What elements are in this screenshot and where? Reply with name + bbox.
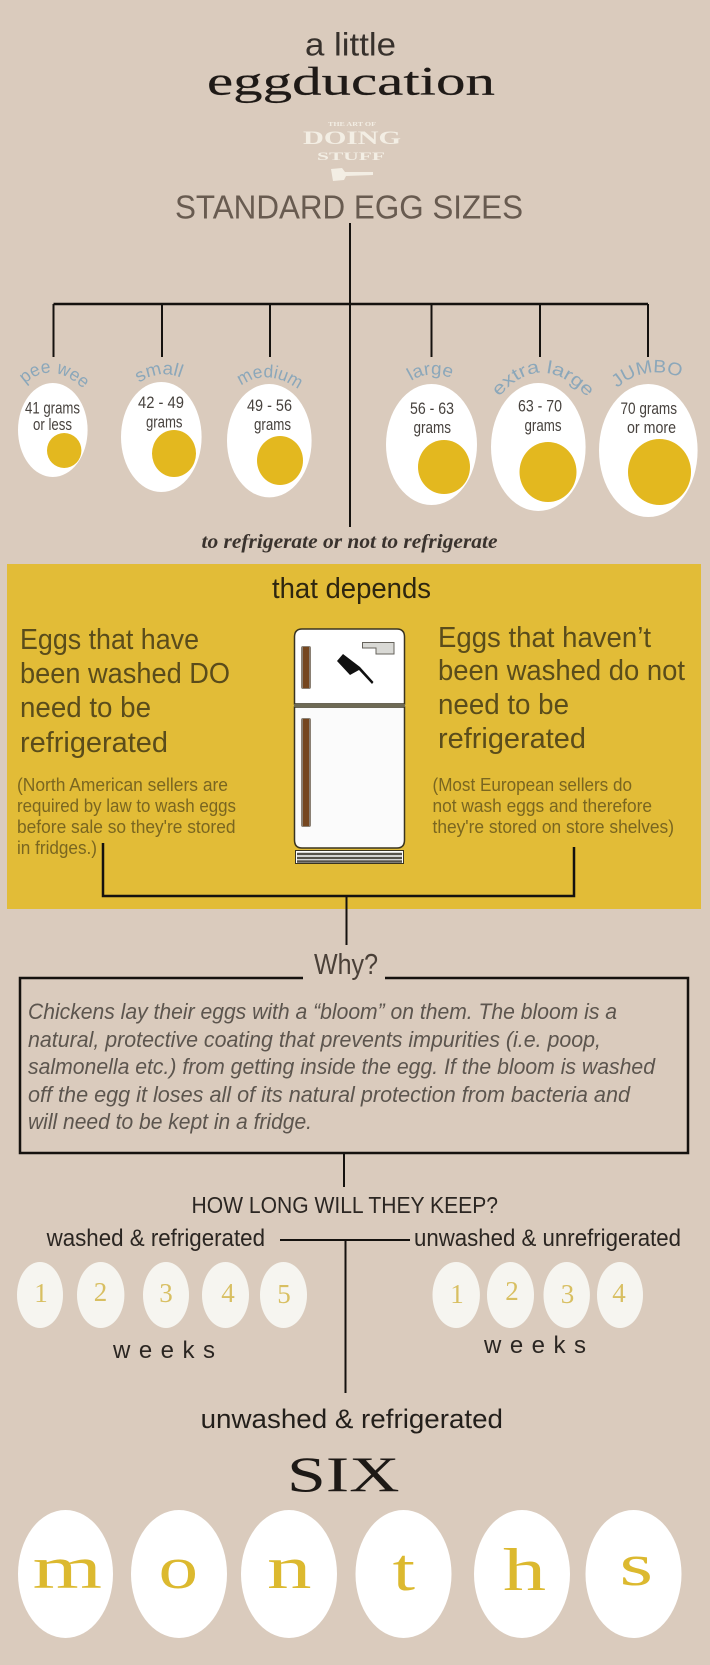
panel heading: that depends <box>272 573 431 605</box>
title line: a little: a little <box>305 26 396 62</box>
egg row: months: s <box>620 1532 653 1598</box>
egg: extra large <box>491 360 592 511</box>
egg row: 5 weeks: 2 <box>94 1277 107 1307</box>
egg: jumbo <box>599 360 698 517</box>
egg: extra large: extra large <box>494 360 592 395</box>
left text: washed eggs: Eggs that have <box>20 624 199 656</box>
right text: unwashed eggs: need to be <box>438 689 569 721</box>
explanation text: natural, protective coating that prevents impurities (i.e. poop, <box>28 1027 601 1052</box>
left text: washed eggs: required by law to wash eggs <box>17 795 236 816</box>
label: weeks right: weeks <box>483 1332 586 1359</box>
heading: standard egg sizes: STANDARD EGG SIZES <box>175 188 523 226</box>
left text: washed eggs: been washed DO <box>20 658 230 690</box>
icon: fridge <box>294 629 405 864</box>
egg row: months: h <box>503 1537 546 1603</box>
left text: washed eggs: in fridges.) <box>17 837 97 858</box>
egg row: months <box>18 1510 682 1638</box>
left text: washed eggs: before sale so they're stored <box>17 816 236 837</box>
script subheading: to refrigerate or not to refrigerate <box>202 531 498 553</box>
left text: washed eggs: refrigerated <box>20 727 168 759</box>
egg row: months: m <box>33 1535 102 1601</box>
egg row: 5 weeks <box>17 1262 307 1328</box>
explanation text: off the egg it loses all of its natural protection from bacteria and <box>28 1082 631 1107</box>
connector: why to how long <box>343 1153 345 1187</box>
egg: pee wee: pee wee <box>20 363 88 387</box>
egg: large <box>386 364 477 505</box>
explanation text: salmonella etc.) from getting inside the egg. If the bloom is washed <box>28 1054 656 1079</box>
right text: unwashed eggs: been washed do not <box>438 655 685 687</box>
egg row: 4 weeks: 4 <box>612 1278 626 1308</box>
egg: extra large: grams <box>524 417 562 435</box>
bracket connector <box>103 843 574 896</box>
egg: pee wee: 41 grams <box>25 400 80 418</box>
egg: medium <box>227 364 312 498</box>
label: unwashed and unrefrigerated: unwashed & unrefrigerated <box>414 1225 681 1252</box>
egg row: months: n <box>267 1535 312 1601</box>
egg row: months: o <box>158 1535 198 1601</box>
egg: jumbo: 70 grams <box>620 400 677 418</box>
right text: unwashed eggs: (Most European sellers do <box>432 774 632 795</box>
tree connector lines <box>54 223 648 527</box>
egg: medium: 49 - 56 <box>247 397 292 415</box>
egg: large: 56 - 63 <box>410 400 454 418</box>
egg: pee wee: or less <box>33 416 72 434</box>
egg: small: grams <box>146 414 182 432</box>
egg row: 5 weeks: 4 <box>221 1278 235 1308</box>
egg row: 5 weeks: 5 <box>277 1279 291 1309</box>
connector: keep-time branches <box>280 1240 410 1393</box>
egg: small <box>121 362 202 492</box>
egg: jumbo: or more <box>627 419 676 437</box>
label: weeks left: weeks <box>112 1337 215 1364</box>
egg row: 4 weeks <box>432 1262 643 1328</box>
logo: the art of doing stuff: THE ART OF <box>328 122 376 128</box>
egg row: 4 weeks: 3 <box>561 1279 574 1309</box>
explanation text: will need to be kept in a fridge. <box>28 1109 312 1134</box>
label: washed and refrigerated: washed & refrigerated <box>46 1225 265 1252</box>
panel: that depends <box>7 564 701 909</box>
egg row: 5 weeks: 1 <box>34 1278 48 1308</box>
right text: unwashed eggs <box>432 622 685 837</box>
egg row: 4 weeks: 2 <box>505 1276 519 1306</box>
right text: unwashed eggs: not wash eggs and therefore <box>432 795 652 816</box>
heading: six: SIX <box>287 1446 400 1502</box>
title line: eggducation: eggducation <box>207 58 495 104</box>
right text: unwashed eggs: Eggs that haven’t <box>438 622 651 654</box>
explanation text: Chickens lay their eggs with a “bloom” on them. The bloom is a <box>28 999 617 1024</box>
egg: small: small <box>136 362 184 382</box>
right text: unwashed eggs: they're stored on store shelves) <box>432 816 674 837</box>
title <box>207 26 495 104</box>
left text: washed eggs: (North American sellers are <box>17 774 228 795</box>
explanation text <box>28 999 656 1134</box>
egg: large: grams <box>414 419 451 437</box>
right text: unwashed eggs: refrigerated <box>438 723 586 755</box>
egg: jumbo: JUMBO <box>612 360 682 386</box>
egg: medium: grams <box>254 416 291 434</box>
egg: medium: medium <box>237 364 302 388</box>
label: unwashed and refrigerated: unwashed & refrigerated <box>201 1404 503 1434</box>
egg: extra large: 63 - 70 <box>518 398 562 416</box>
egg: small: 42 - 49 <box>138 394 184 412</box>
heading: why: Why? <box>314 949 378 981</box>
left text: washed eggs <box>17 624 236 858</box>
egg row: months: t <box>393 1537 415 1603</box>
panel: why explanation box <box>20 978 688 1153</box>
logo: the art of doing stuff: DOING <box>303 128 401 149</box>
connector: panel to why <box>346 896 348 945</box>
egg row: 4 weeks: 1 <box>450 1279 464 1309</box>
left text: washed eggs: need to be <box>20 692 151 724</box>
logo: the art of doing stuff: STUFF <box>317 149 385 163</box>
egg row: 5 weeks: 3 <box>159 1278 173 1308</box>
egg: large: large <box>406 364 452 380</box>
heading: how long will they keep: HOW LONG WILL THEY KEEP? <box>192 1192 498 1218</box>
logo: the art of doing stuff <box>303 122 401 181</box>
egg: pee wee <box>18 363 88 477</box>
